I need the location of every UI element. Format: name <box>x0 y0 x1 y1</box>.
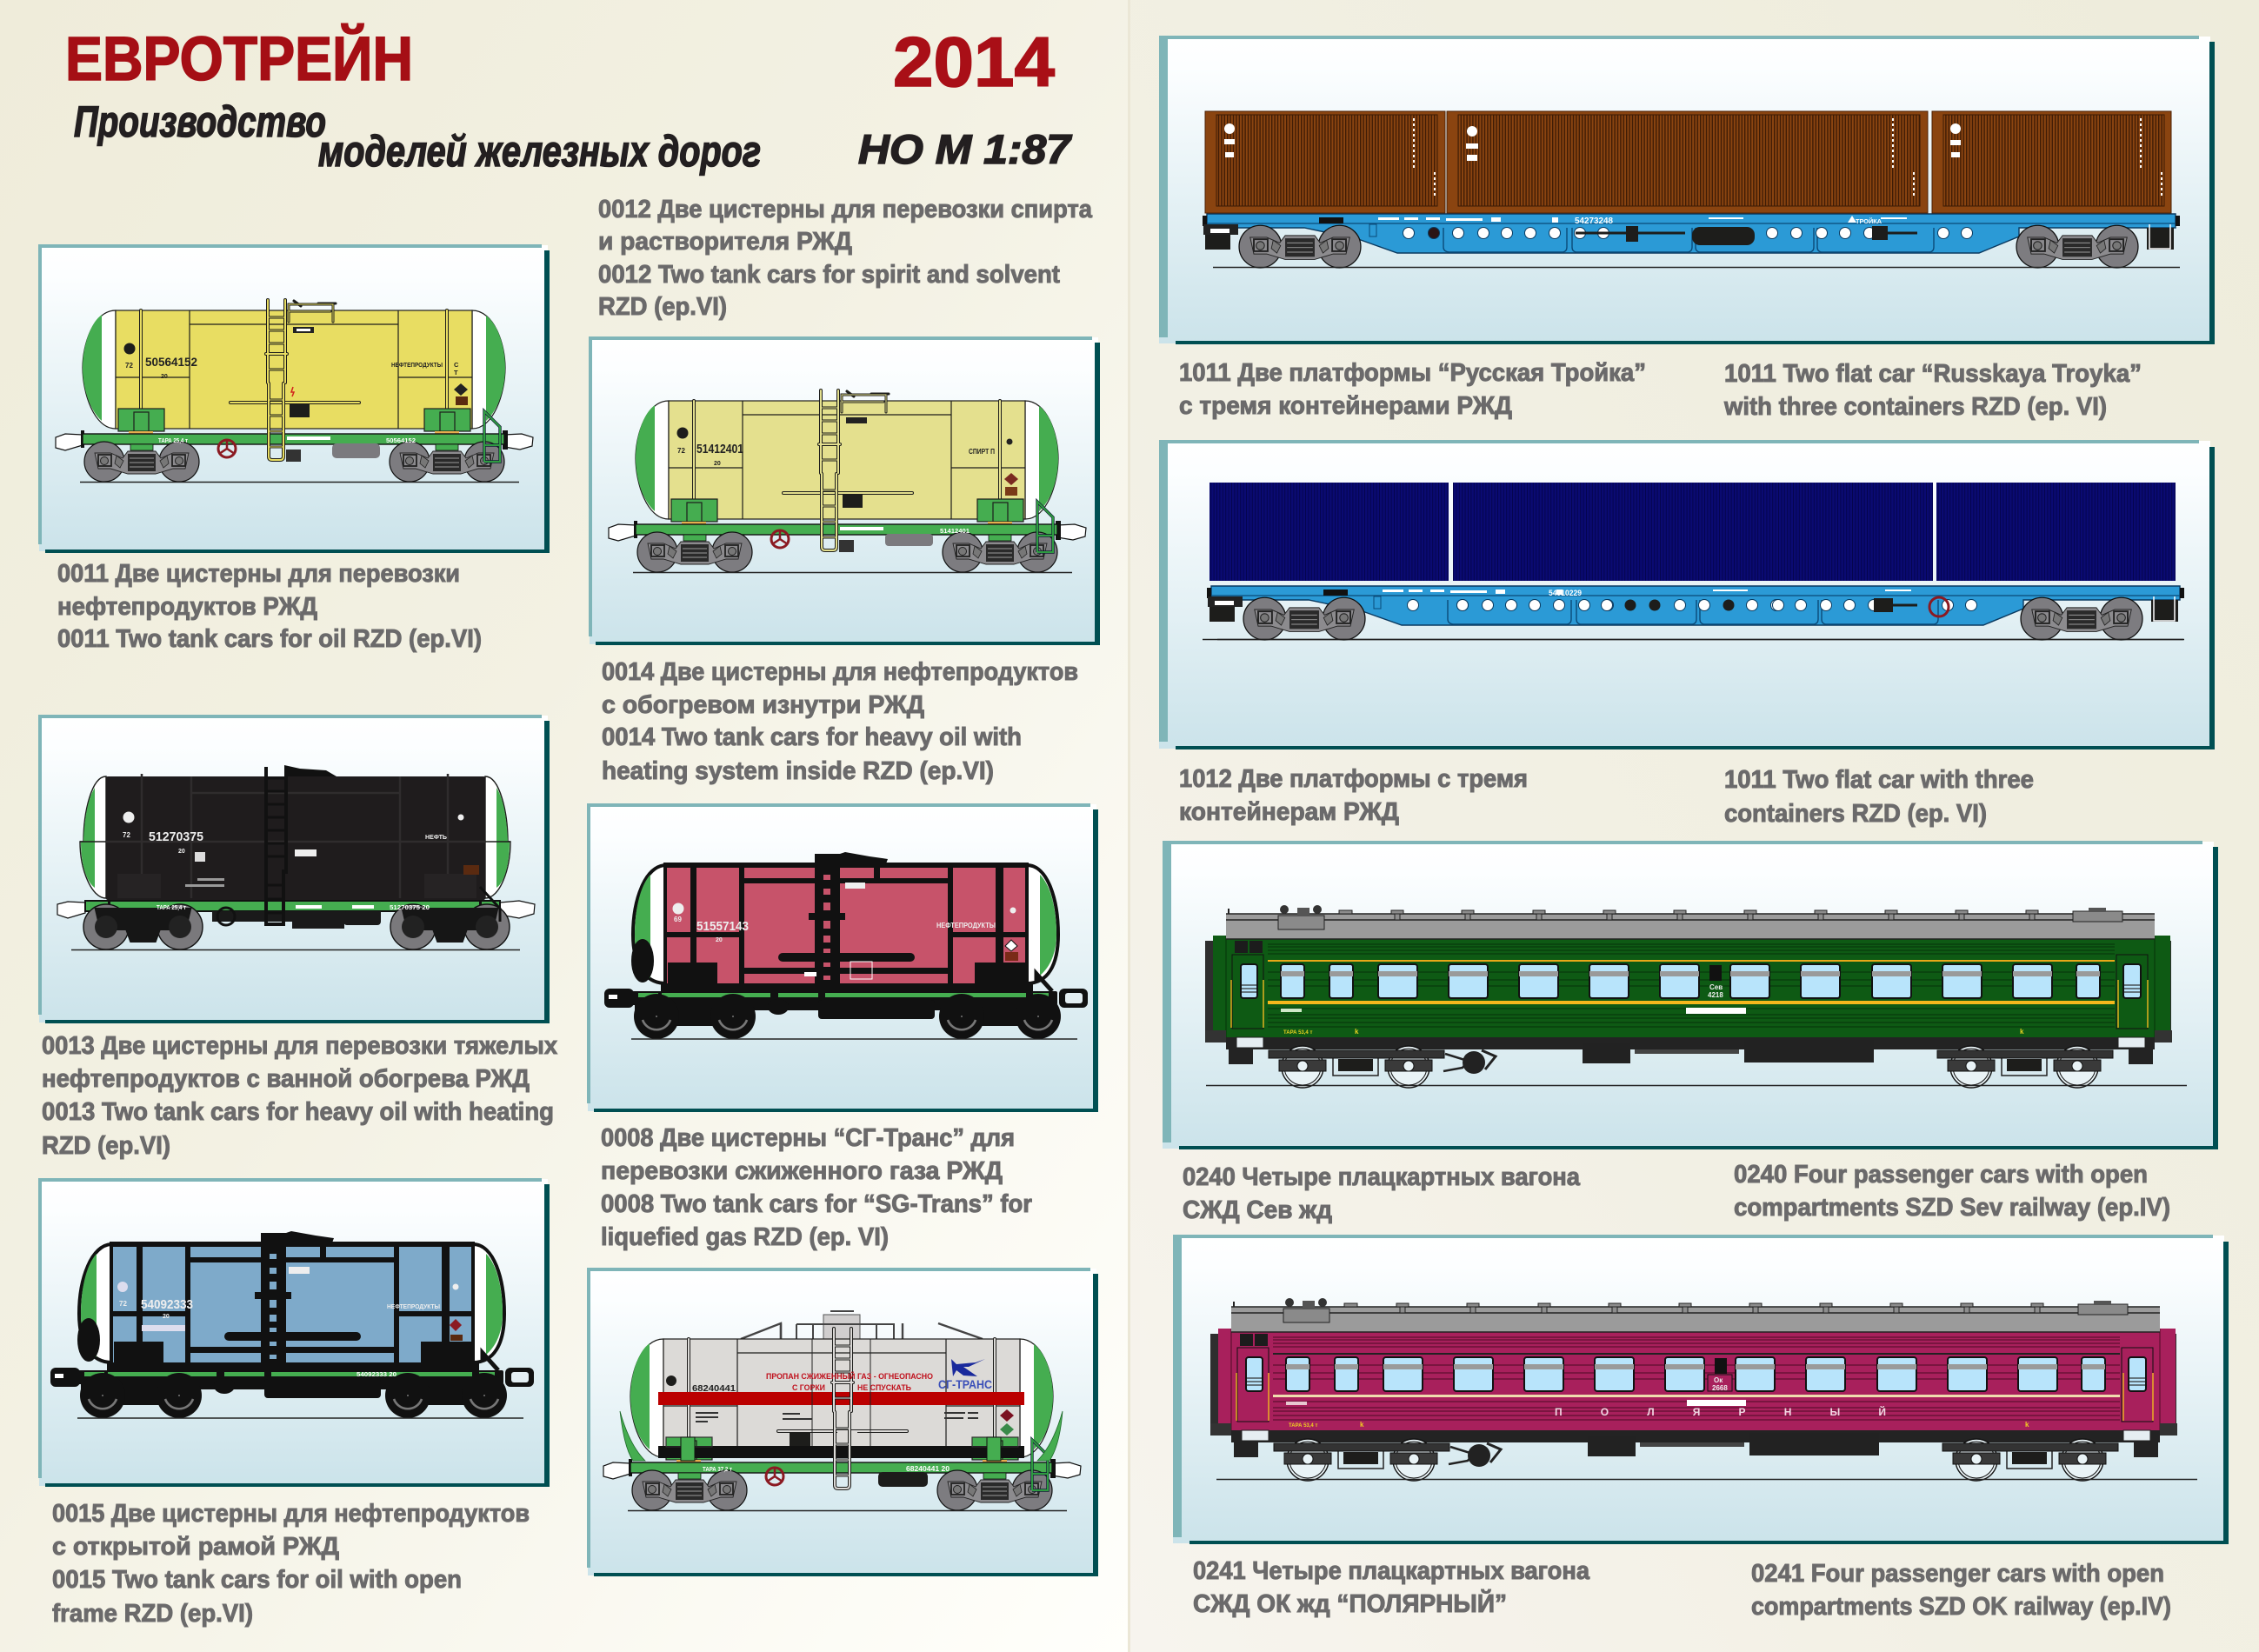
caption: 0013: 0013 Две цистерны для перевозки тяжелых <box>42 1032 557 1060</box>
tank car 0013: ТАРА 25,4 т <box>157 905 186 911</box>
passenger car 0240: 4218 <box>1708 991 1723 999</box>
caption: 0241 English <box>1751 1560 2171 1621</box>
tank car 0011: 50564152 <box>386 438 416 444</box>
tank car 0008: 68240441 20 <box>906 1465 950 1473</box>
flat car 1011: 54273248 <box>1575 216 1613 226</box>
panel frame <box>38 715 550 1023</box>
caption: 0015: с открытой рамой РЖД <box>52 1533 339 1561</box>
caption: 0008 <box>601 1124 1032 1251</box>
passenger car 0240 <box>1205 905 2187 1088</box>
passenger car 0241 <box>1210 1298 2177 1481</box>
caption: 0012: 0012 Two tank cars for spirit and solvent <box>598 261 1060 289</box>
flat car 1011: ТРОЙКА <box>1856 217 1882 225</box>
caption: 0011: 0011 Две цистерны для перевозки <box>57 560 460 588</box>
caption: 0013: RZD (ep.VI) <box>42 1132 170 1160</box>
caption: 0014: 0014 Two tank cars for heavy oil with <box>602 723 1022 751</box>
caption: 0240 Russian <box>1183 1163 1581 1224</box>
tank car 0013: 72 <box>123 831 130 839</box>
caption: 0008: 0008 Две цистерны “СГ-Транс” для <box>601 1124 1015 1152</box>
tank car 0008: С ГОРКИ <box>792 1383 825 1393</box>
panel frame <box>589 336 1100 645</box>
panel: 0241 crimson passenger car <box>1173 1235 2229 1544</box>
tank car 0015: 54092333 <box>141 1297 193 1312</box>
caption: 1011 English: 1011 Two flat car “Russkaya Troyka” <box>1724 360 2142 388</box>
passenger car 0240: ТАРА 53,4 т <box>1283 1030 1312 1036</box>
tank car 0011: 72 <box>125 362 133 370</box>
tank car 0008: ПРОПАН СЖИЖЕННЫЙ ГАЗ - ОГНЕОПАСНО <box>766 1371 933 1382</box>
caption: 0012: RZD (ep.VI) <box>598 293 727 321</box>
tank car 0013: 20 <box>178 849 185 855</box>
tank car 0014: НЕФТЕПРОДУКТЫ <box>936 922 996 929</box>
caption: 0008: перевозки сжиженного газа РЖД <box>601 1157 1003 1185</box>
flat car 1012: 54910229 <box>1549 589 1582 597</box>
passenger car 0240: k <box>1355 1028 1359 1036</box>
panel frame <box>1159 440 2215 749</box>
caption: 0008: liquefied gas RZD (ep. VI) <box>601 1223 889 1251</box>
caption: 0008: 0008 Two tank cars for “SG-Trans” for <box>601 1190 1032 1218</box>
tank car 0013: 51270375 20 <box>390 905 430 911</box>
tank car 0015: 54092333 20 <box>357 1372 396 1378</box>
tank car 0015 <box>50 1231 534 1418</box>
tank car 0015: 20 <box>163 1314 170 1320</box>
tank car 0014: 51557143 <box>696 919 749 934</box>
caption: 0240 English <box>1734 1161 2170 1222</box>
panel frame <box>1173 1235 2229 1544</box>
passenger car 0240: k <box>2020 1028 2024 1036</box>
caption: 0013 <box>42 1032 557 1160</box>
tank car 0014: 20 <box>716 937 723 943</box>
panel frame <box>587 1268 1098 1576</box>
panel frame <box>1163 841 2218 1149</box>
passenger car 0241: k <box>2025 1421 2029 1429</box>
panel frame <box>1159 36 2215 344</box>
caption: 1012 English: containers RZD (ep. VI) <box>1724 800 1987 828</box>
panel frame <box>38 1178 550 1487</box>
passenger car 0241: k <box>1360 1421 1364 1429</box>
caption: 0241 Russian: 0241 Четыре плацкартных вагона <box>1193 1557 1590 1585</box>
caption: 0241 English: 0241 Four passenger cars with open <box>1751 1560 2164 1588</box>
tank car 0012: 72 <box>677 447 685 455</box>
caption: 0240 English: 0240 Four passenger cars with open <box>1734 1161 2148 1189</box>
tank car 0011: ТАРА 25,4 т <box>158 438 188 444</box>
caption: 0011: нефтепродуктов РЖД <box>57 593 317 621</box>
tank car 0012 <box>609 390 1086 572</box>
panel frame <box>38 244 550 553</box>
subtitle: railway models: моделей железных дорог <box>318 127 761 176</box>
panel: 1012 flat car with blue containers <box>1159 440 2215 749</box>
tank car 0008: СГ-ТРАНС <box>938 1377 992 1391</box>
caption: 0014: с обогревом изнутри РЖД <box>602 691 924 719</box>
caption: 0241 Russian: СЖД ОК жд “ПОЛЯРНЫЙ” <box>1193 1589 1507 1618</box>
caption: 0015: 0015 Two tank cars for oil with open <box>52 1566 462 1594</box>
tank car 0015: 72 <box>119 1300 127 1308</box>
panel frame <box>587 803 1098 1112</box>
tank car 0012: СПИРТ П <box>969 448 995 456</box>
caption: 1011 English: with three containers RZD (ep. VI) <box>1723 393 2107 421</box>
passenger car 0240: Сев <box>1709 983 1723 991</box>
caption: 0241 Russian <box>1193 1557 1590 1618</box>
tank car 0014 <box>604 852 1088 1039</box>
page background: left page <box>0 0 1129 1652</box>
caption: 1012 Russian <box>1179 765 1528 826</box>
panel: 0013 black tank car <box>38 715 550 1023</box>
caption: 1012 English <box>1724 766 2034 828</box>
passenger car 0241: ТАРА 53,4 т <box>1289 1423 1317 1429</box>
panel: 0014 red tank car <box>587 803 1098 1112</box>
tank car 0011: 20 <box>161 374 168 380</box>
tank car 0012: 51412401 <box>940 529 970 535</box>
tank car 0008: 68240441 <box>692 1384 736 1394</box>
flat car 1012 <box>1207 483 2184 640</box>
caption: 0014: 0014 Две цистерны для нефтепродуктов <box>602 658 1078 686</box>
tank car 0011: Т <box>454 369 458 376</box>
caption: 1012 English: 1011 Two flat car with three <box>1724 766 2034 794</box>
caption: 0015: frame RZD (ep.VI) <box>52 1600 253 1628</box>
caption: 0011: 0011 Two tank cars for oil RZD (ep.VI) <box>57 625 482 653</box>
scale label: НО М 1:87 <box>858 126 1072 172</box>
caption: 1011 Russian: с тремя контейнерами РЖД <box>1179 392 1512 420</box>
flat car 1011 <box>1203 111 2180 268</box>
year: 2014 <box>893 23 1055 102</box>
caption: 0015: 0015 Две цистерны для нефтепродуктов <box>52 1500 530 1528</box>
passenger car 0241: 2668 <box>1712 1384 1728 1392</box>
caption: 0011 <box>57 560 482 653</box>
tank car 0014: 69 <box>674 916 682 923</box>
caption: 0012: 0012 Две цистерны для перевозки спирта <box>598 196 1093 223</box>
caption: 0015 <box>52 1500 530 1628</box>
panel: 0015 blue tank car <box>38 1178 550 1487</box>
caption: 1011 English <box>1723 360 2142 421</box>
caption: 0013: нефтепродуктов с ванной обогрева РЖД <box>42 1065 530 1093</box>
tank car 0008: ТАРА 37,2 т <box>703 1467 732 1473</box>
tank car 0015: НЕФТЕПРОДУКТЫ <box>387 1302 440 1310</box>
caption: 1012 Russian: контейнерам РЖД <box>1179 798 1399 826</box>
tank car 0011: 50564152 <box>145 355 197 369</box>
tank car 0012: 20 <box>714 461 721 467</box>
panel: 0012 pale tank car <box>589 336 1100 645</box>
title: ЕВРОТРЕЙН <box>65 24 413 94</box>
panel: 0011 yellow tank car <box>38 244 550 553</box>
caption: 1012 Russian: 1012 Две платформы с тремя <box>1179 765 1528 793</box>
tank car 0008 <box>603 1311 1081 1511</box>
tank car 0011 <box>56 300 533 482</box>
panel: 0240 green passenger car <box>1163 841 2218 1149</box>
passenger car 0241: Ок <box>1714 1376 1723 1384</box>
subtitle: production: Производство <box>74 97 326 146</box>
caption: 0014 <box>602 658 1078 785</box>
caption: 0014: heating system inside RZD (ep.VI) <box>602 757 994 785</box>
tank car 0012: 51412401 <box>696 442 743 456</box>
tank car 0011: НЕФТЕПРОДУКТЫ <box>391 361 443 369</box>
tank car 0013 <box>57 765 535 949</box>
tank car 0013: НЕФТЬ <box>425 833 448 841</box>
caption: 0241 English: compartments SZD OK railway (ep.IV) <box>1751 1593 2171 1621</box>
panel: 0008 SG-Trans gas tank car <box>587 1268 1098 1576</box>
page background: right page <box>1129 0 2259 1652</box>
navy containers <box>1209 483 2176 581</box>
caption: 0240 English: compartments SZD Sev railway (ep.IV) <box>1734 1194 2170 1222</box>
caption: 0240 Russian: СЖД Сев жд <box>1183 1196 1332 1224</box>
brown containers <box>1205 111 2171 213</box>
tank car 0011: С <box>454 361 459 369</box>
caption: 0240 Russian: 0240 Четыре плацкартных вагона <box>1183 1163 1581 1191</box>
caption: 0012 <box>598 196 1093 321</box>
passenger car 0241: П О Л Я Р Н Ы Й <box>1555 1405 1886 1418</box>
caption: 0012: и растворителя РЖД <box>598 228 852 256</box>
caption: 1011 Russian: 1011 Две платформы “Русская Тройка” <box>1179 359 1646 387</box>
caption: 1011 Russian <box>1179 359 1646 420</box>
panel: 1011 flat car with brown containers <box>1159 36 2215 344</box>
caption: 0013: 0013 Two tank cars for heavy oil with heating <box>42 1098 554 1126</box>
tank car 0008: НЕ СПУСКАТЬ <box>857 1383 911 1393</box>
tank car 0013: 51270375 <box>149 829 203 844</box>
